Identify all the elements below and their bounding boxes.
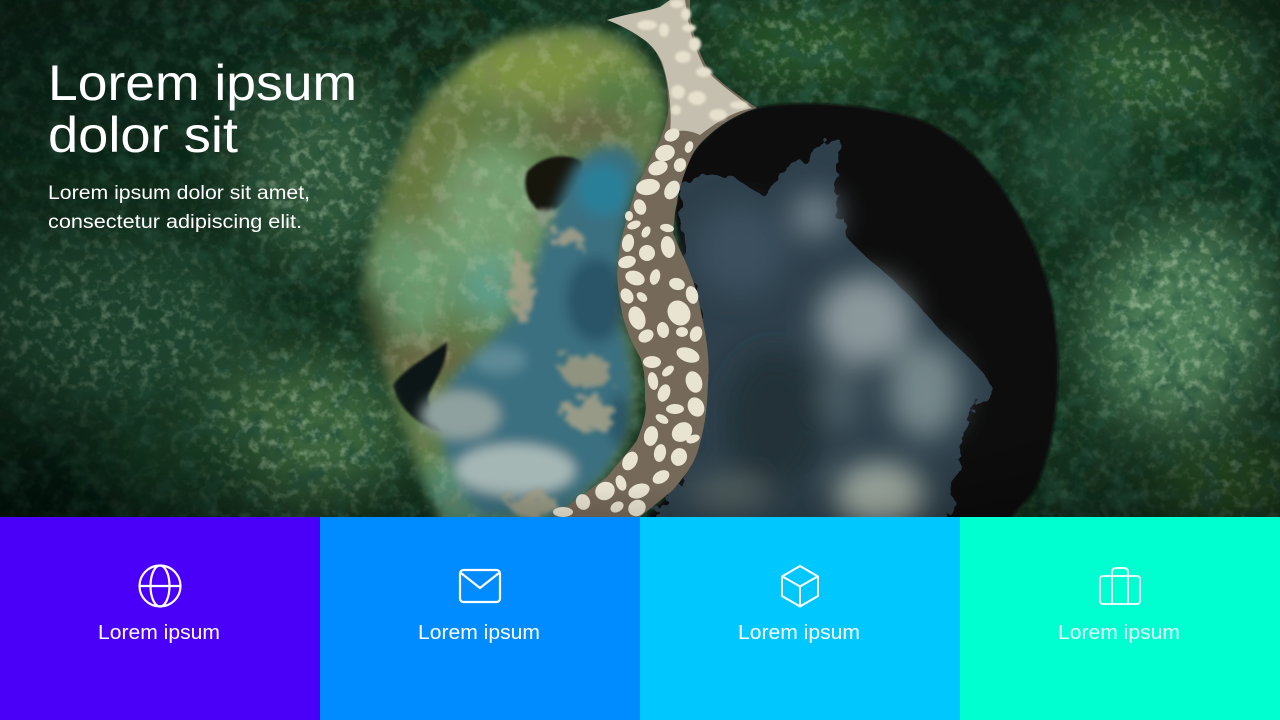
label: box panel: Lorem ipsum	[738, 622, 860, 644]
title	[48, 55, 357, 163]
label: globe panel: Lorem ipsum	[98, 622, 220, 644]
forest canopy: left	[0, 0, 500, 540]
subtitle text: consectetur adipiscing elit.	[48, 212, 302, 233]
panel: box	[640, 517, 960, 720]
icon: envelope	[460, 570, 500, 602]
stone causeway	[553, 0, 757, 519]
subtitle text: Lorem ipsum dolor sit amet,	[48, 183, 310, 204]
pond dark tree reflection	[640, 103, 1058, 525]
left pond: dark hollows	[393, 156, 582, 432]
right pond	[646, 102, 1060, 517]
title: dolor sit	[48, 107, 238, 163]
panel: briefcase	[960, 517, 1280, 720]
left pond: blue water	[420, 146, 642, 517]
panel: globe	[0, 517, 320, 720]
panel: mail	[320, 517, 640, 720]
icon: cube	[782, 566, 818, 606]
label: mail panel: Lorem ipsum	[418, 622, 540, 644]
left pond: green algae	[356, 20, 668, 517]
subtitle text	[48, 183, 310, 233]
left pond: floating silt	[509, 203, 616, 517]
aerial photo: ponds in forest	[0, 0, 1280, 560]
icon: globe	[140, 566, 180, 606]
photo edge shading	[0, 0, 1280, 517]
title: Lorem ipsum	[48, 55, 357, 111]
pond sky reflection	[650, 138, 993, 517]
forest canopy: right	[715, 0, 1280, 525]
icon: suitcase	[1100, 568, 1140, 604]
foliage texture	[0, 0, 1280, 517]
label: briefcase panel: Lorem ipsum	[1058, 622, 1180, 644]
